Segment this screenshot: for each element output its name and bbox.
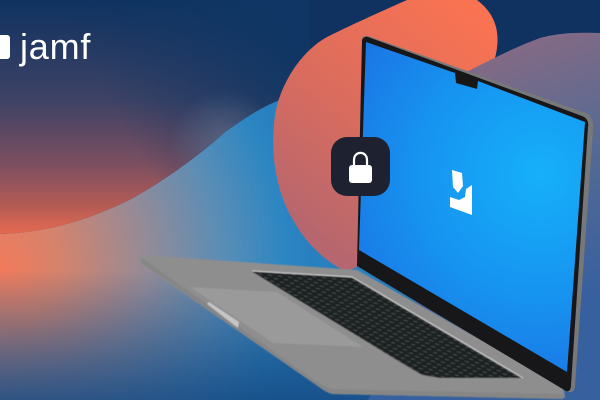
logo mark: [0, 35, 10, 59]
laptop: screen logo: [450, 170, 472, 215]
laptop: screen: [359, 42, 585, 372]
laptop: base: [138, 255, 565, 399]
laptop: bezel: [357, 37, 588, 391]
icon: padlock badge: [331, 137, 390, 196]
laptop: [138, 36, 593, 399]
background: lower gradient: [0, 90, 600, 400]
laptop: lid rim: [357, 36, 593, 392]
background: orange blob: [273, 0, 498, 272]
background: left wave: [0, 0, 310, 234]
laptop: side port: [207, 302, 239, 328]
logo wordmark: jamf: [20, 26, 91, 66]
laptop: keyboard: [251, 271, 522, 378]
background: right muted blob: [368, 33, 600, 400]
logo: jamf: [0, 26, 91, 66]
laptop: trackpad: [190, 287, 363, 347]
